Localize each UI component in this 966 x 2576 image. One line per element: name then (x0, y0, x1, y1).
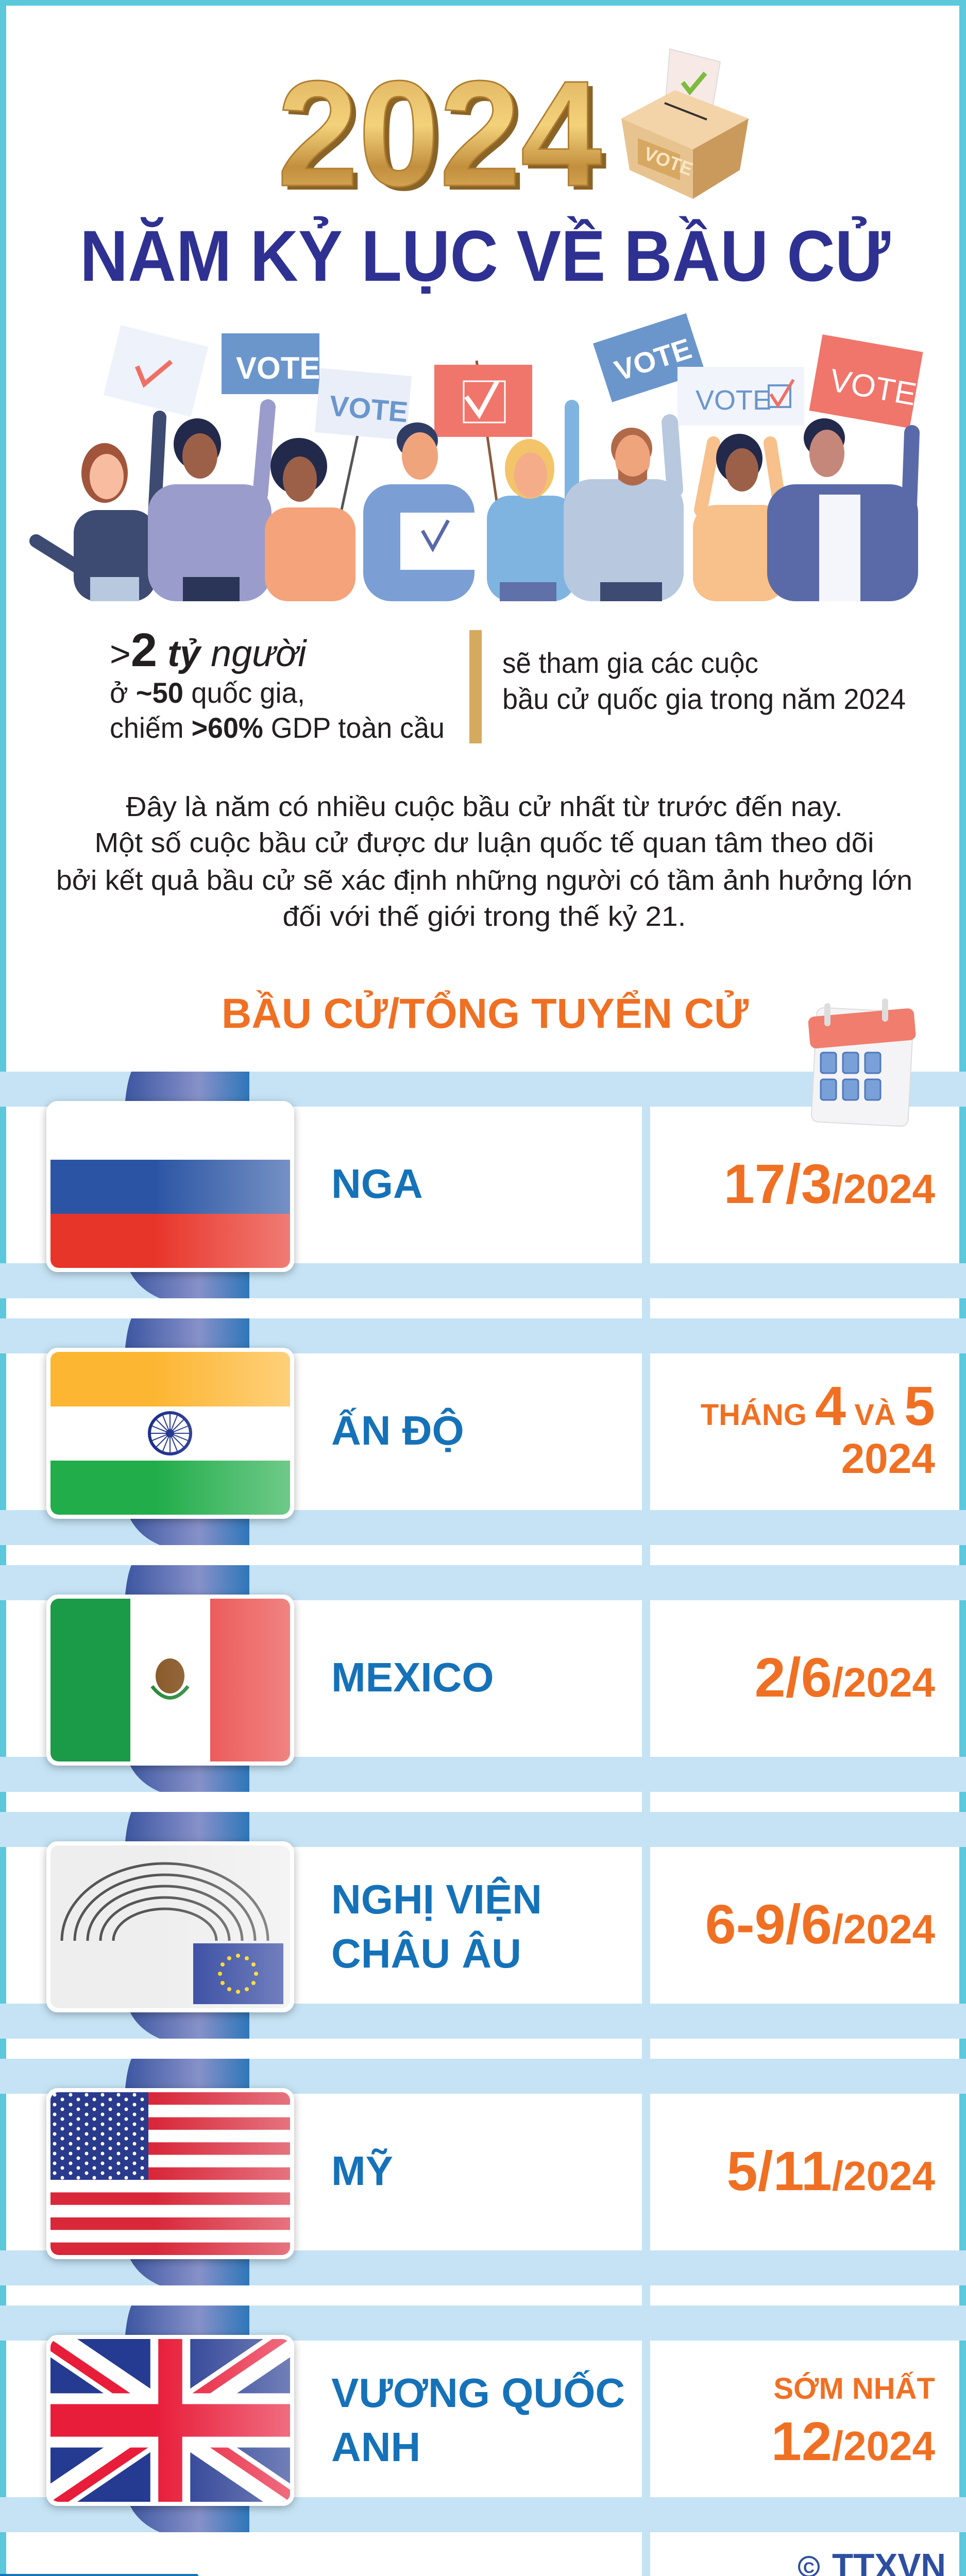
table background: column divider (642, 1072, 650, 2576)
country name (331, 1876, 542, 1976)
flag: EU parliament (46, 1841, 294, 2012)
person 3 (265, 438, 355, 601)
intro paragraph: Đây là năm có nhiều cuộc bầu cử nhất từ trước đến nay. (126, 791, 843, 822)
country name: NGA (331, 1161, 423, 1207)
date (701, 1375, 935, 1482)
sign 1 (104, 325, 208, 417)
section heading: BẦU CỬ/TỔNG TUYỂN CỬ (222, 990, 749, 1037)
stats: right block: sẽ tham gia các cuộc (502, 647, 758, 679)
person 1 (36, 417, 160, 601)
title: main heading: NĂM KỶ LỤC VỀ BẦU CỬ (80, 215, 891, 296)
row: European Parliament (0, 1812, 966, 2039)
stats: right block (502, 647, 906, 715)
row: USA (0, 2059, 966, 2285)
sign 2 (222, 333, 320, 394)
date: SỚM NHẤT (773, 2372, 935, 2405)
country name: ANH (331, 2424, 420, 2470)
row: United Kingdom (0, 2306, 966, 2532)
person 2 (148, 407, 272, 601)
intro paragraph: đối với thế giới trong thế kỷ 21. (282, 901, 686, 932)
person 4 (363, 422, 474, 601)
illustration: crowd of voters with signs (36, 313, 923, 601)
sign 6 (677, 367, 804, 426)
date: THÁNG 4 VÀ 5 (701, 1375, 935, 1437)
flag: India (46, 1348, 294, 1519)
date: 2024 (841, 1435, 935, 1482)
country name: MEXICO (331, 1654, 494, 1700)
icon: calendar (808, 998, 916, 1127)
stats: left block: ở ~50 quốc gia, (110, 676, 305, 709)
footer bar (0, 2574, 966, 2576)
sign 7 (809, 334, 923, 428)
divider bar gold (469, 630, 482, 743)
icon: ballot box: VOTE (641, 143, 696, 180)
country name: ẤN ĐỘ (331, 1408, 464, 1453)
intro paragraph: Một số cuộc bầu cử được dư luận quốc tế quan tâm theo dõi (95, 827, 874, 858)
row: Mexico (0, 1565, 966, 1792)
sign 4 (434, 361, 532, 577)
stats: left block (110, 624, 445, 744)
sign 2: VOTE (236, 351, 320, 385)
country name: MỸ (331, 2148, 393, 2194)
stats: right block: bầu cử quốc gia trong năm 2024 (502, 683, 906, 715)
sign 3 (304, 368, 412, 560)
title: 2024: 2024 (277, 49, 603, 217)
country name: CHÂU ÂU (331, 1930, 521, 1976)
person 8 (767, 418, 918, 601)
stats: left block: chiếm >60% GDP toàn cầu (110, 711, 445, 744)
date: 6-9/6/2024 (705, 1893, 936, 1955)
stats: left block: >2 tỷ người (110, 624, 307, 676)
date: 2/6/2024 (755, 1646, 936, 1708)
date: 12/2024 (771, 2411, 936, 2472)
intro paragraph: bởi kết quả bầu cử sẽ xác định những người có tầm ảnh hưởng lớn (56, 865, 912, 896)
country name (331, 2370, 625, 2470)
flag: UK (46, 2335, 294, 2506)
person 7 (693, 434, 786, 601)
flag: USA (46, 2088, 294, 2259)
date (771, 2372, 936, 2472)
date: 17/3/2024 (724, 1153, 936, 1215)
sign 3: VOTE (328, 389, 409, 428)
country name: VƯƠNG QUỐC (331, 2370, 625, 2416)
date: 5/11/2024 (727, 2140, 936, 2202)
country name: NGHỊ VIỆN (331, 1876, 542, 1922)
row: Russia (0, 1072, 966, 1298)
icon: ballot box (621, 49, 749, 199)
row: India (0, 1318, 966, 1545)
person 5 (487, 407, 576, 601)
sign 7: VOTE (827, 363, 919, 413)
flag: Mexico (46, 1595, 294, 1766)
sign 5 (593, 313, 705, 402)
flag: Russia (46, 1101, 294, 1272)
intro paragraph (56, 791, 912, 932)
sign 6: VOTE (696, 385, 771, 416)
person 6 (564, 422, 684, 601)
sign 5: VOTE (611, 332, 696, 387)
title: 2024: 2024 (282, 54, 608, 222)
